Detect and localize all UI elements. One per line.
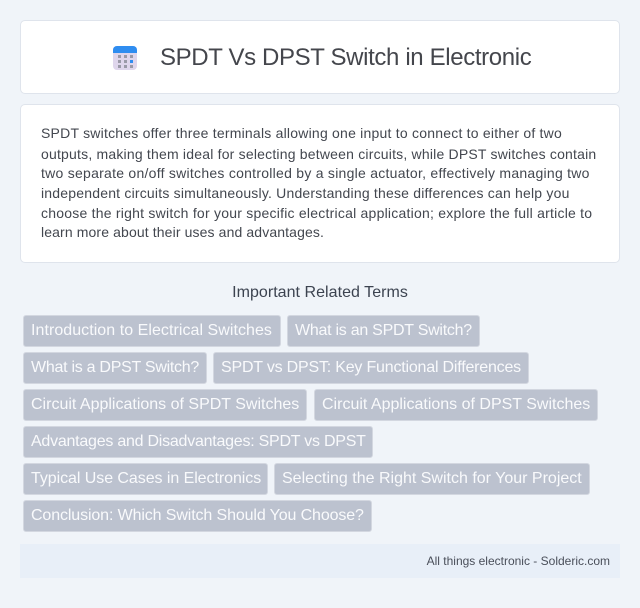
summary text: independent circuits simultaneously. Understanding these differences can help you (41, 185, 570, 201)
summary text: SPDT switches offer three terminals allowing one input to connect to either of two (41, 125, 562, 141)
title: SPDT Vs DPST Switch in Electronic (160, 44, 531, 71)
summary text: learn more about their uses and advantages. (41, 224, 324, 240)
summary text (41, 125, 596, 240)
related terms tags: Typical Use Cases in Electronics (31, 470, 261, 487)
related terms tags: Conclusion: Which Switch Should You Choose? (31, 507, 364, 524)
related terms tags (23, 315, 598, 532)
related terms tags: Circuit Applications of SPDT Switches (31, 396, 299, 413)
summary text: two separate on/off switches controlled by a single actuator, effectively managing two (41, 165, 590, 181)
related terms tags: What is an SPDT Switch? (295, 322, 472, 339)
related terms tags: Circuit Applications of DPST Switches (322, 396, 590, 413)
related terms heading: Important Related Terms (232, 284, 408, 301)
icon: calendar (113, 46, 137, 70)
related terms tags: Selecting the Right Switch for Your Project (282, 470, 582, 487)
summary text: outputs, making them ideal for selecting between circuits, while DPST switches contain (41, 146, 596, 162)
header panel (20, 20, 620, 94)
related terms tags: SPDT vs DPST: Key Functional Differences (221, 359, 521, 376)
related terms tags: Introduction to Electrical Switches (31, 322, 272, 339)
related terms tags: What is a DPST Switch? (31, 359, 199, 376)
related terms tags: Advantages and Disadvantages: SPDT vs DPST (31, 433, 366, 450)
footer bar (20, 544, 620, 578)
footer text: All things electronic - Solderic.com (427, 554, 610, 568)
summary text: choose the right switch for your specific electrical application; explore the full article to (41, 205, 592, 221)
summary panel (20, 104, 620, 263)
